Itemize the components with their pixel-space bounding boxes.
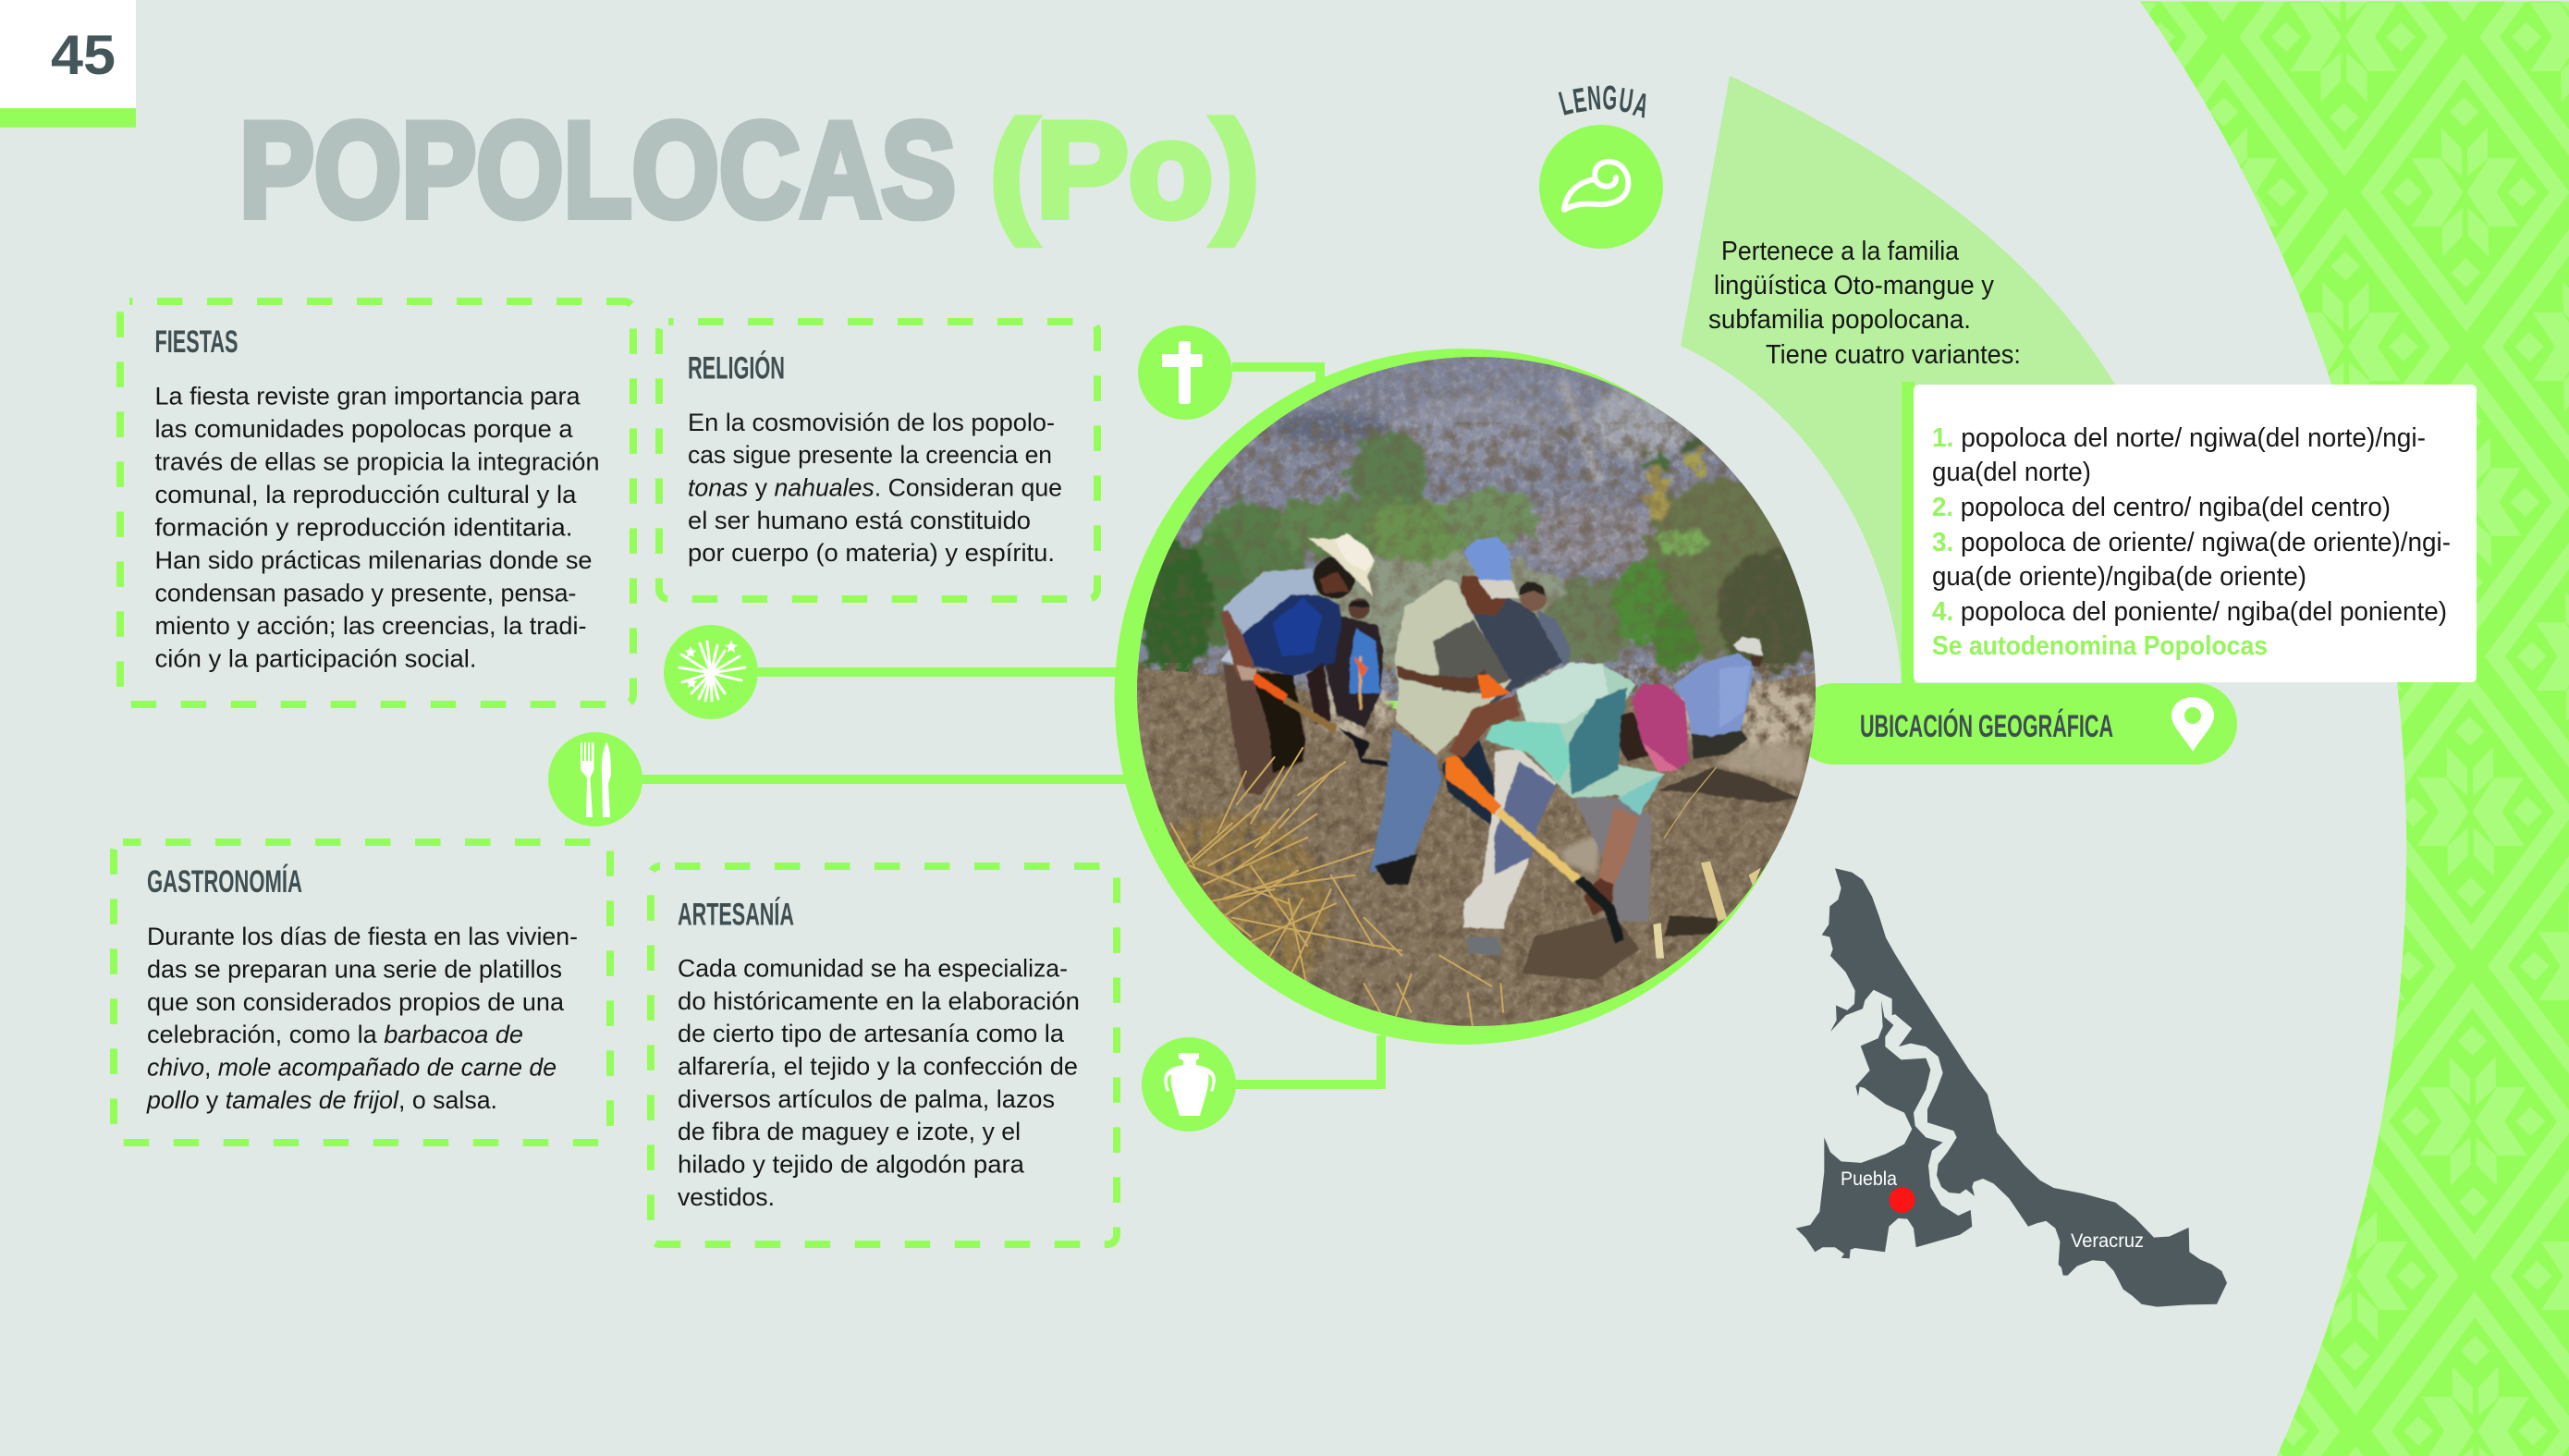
soil — [1137, 663, 1816, 1026]
patterned textile band on the right — [2140, 2, 2569, 1456]
body: gastronomía: chivo, mole acompañado de carne de — [147, 1054, 557, 1082]
body: gastronomía: que son considerados propios de una — [147, 988, 565, 1016]
heading: gastronomía: GASTRONOMÍA — [147, 864, 302, 899]
worker 1 arms — [1220, 610, 1255, 681]
worker 3 head and cap — [1620, 712, 1652, 761]
worker 3 trousers — [1572, 792, 1652, 922]
body: religión: cas sigue presente la creencia en — [688, 441, 1052, 469]
worker 2 jeans — [1442, 740, 1495, 826]
worker 2 head and cap — [1461, 576, 1507, 617]
worker 3 arms — [1449, 695, 1519, 758]
heading: lengua (curved): G — [1602, 80, 1618, 117]
body: fiestas: las comunidades popolocas porque a — [155, 415, 573, 443]
body: artesanía: Cada comunidad se ha especializa- — [678, 954, 1068, 982]
red location dot — [1890, 1187, 1915, 1213]
heading: lengua (curved): E — [1571, 81, 1589, 121]
panel: variantes list: 4. popoloca del poniente/ ngiba(del poniente) — [1932, 597, 2447, 627]
body: fiestas: Han sido prácticas milenarias donde se — [155, 546, 592, 574]
heading: fiestas: FIESTAS — [155, 324, 239, 360]
label: Veracruz: Veracruz — [2071, 1230, 2144, 1252]
worker 2 arm and grip — [1396, 666, 1486, 693]
map: Puebla and Veracruz — [1796, 868, 2227, 1307]
heading: artesanía: ARTESANÍA — [678, 897, 794, 932]
heading: lengua (curved): N — [1586, 80, 1602, 118]
panel: lengua fan — [1681, 76, 2115, 682]
body: artesanía — [678, 954, 1080, 1211]
lengua description text: subfamilia popolocana. — [1708, 305, 1971, 335]
body: artesanía: de cierto tipo de artesanía como la — [678, 1020, 1065, 1047]
corn stalks — [1701, 862, 1727, 922]
body: gastronomía: das se preparan una serie de platillos — [147, 956, 562, 984]
page number tab — [0, 0, 136, 128]
worker 1 trousers — [1223, 664, 1305, 795]
body: fiestas: ción y la participación social. — [155, 645, 477, 673]
body: religión: el ser humano está constituido — [688, 507, 1031, 534]
panel: artesanía — [651, 866, 1117, 1244]
panel: variantes list: 1. popoloca del norte/ ngiwa(del norte)/ngi- — [1932, 423, 2426, 453]
body: artesanía: de fibra de maguey e izote, y el — [678, 1118, 1021, 1145]
panel: religión — [659, 322, 1097, 599]
body: artesanía: alfarería, el tejido y la confección de — [678, 1052, 1078, 1080]
panel: variantes list: 2. popoloca del centro/ ngiba(del centro) — [1932, 493, 2391, 522]
workers 3 and 4 — [1445, 636, 1805, 980]
photo: farmers working the soil — [1137, 357, 1816, 1026]
lengua description text: Tiene cuatro variantes: — [1766, 340, 2021, 370]
panel: variantes list: 3. popoloca de oriente/ ngiwa(de oriente)/ngi- — [1932, 528, 2451, 557]
body: religión: En la cosmovisión de los popolo- — [688, 409, 1055, 436]
heading: lengua (curved): A — [1630, 86, 1653, 126]
body: fiestas: miento y acción; las creencias, la tradi- — [155, 612, 586, 640]
panel: variantes list — [1902, 382, 2477, 683]
worker 3 shirt — [1518, 664, 1666, 799]
Puebla area shape — [1796, 1000, 1972, 1258]
icon: clay jar (artesanía) — [1142, 1037, 1236, 1132]
body: religión — [688, 409, 1062, 567]
panel: variantes list: gua(del norte) — [1932, 458, 2091, 487]
dry grass — [1170, 748, 1503, 1026]
body: artesanía: hilado y tejido de algodón para — [678, 1150, 1025, 1178]
body: gastronomía — [146, 923, 578, 1114]
lengua description text — [1708, 237, 2021, 370]
heading: lengua (curved): U — [1617, 81, 1635, 121]
worker 3 shovel — [1445, 755, 1500, 815]
panel: gastronomía — [114, 842, 610, 1143]
page number tab: 45 — [51, 24, 116, 86]
worker 2 shirt — [1466, 597, 1560, 704]
body: fiestas: condensan pasado y presente, pensa- — [155, 579, 577, 606]
body: fiestas: La fiesta reviste gran importancia para — [155, 383, 581, 410]
background boy — [1325, 598, 1384, 728]
panel: variantes list: Se autodenomina Popolocas — [1932, 631, 2268, 661]
workers 1 and 2 with background figures — [1220, 533, 1570, 885]
body: gastronomía: celebración, como la barbacoa de — [147, 1021, 523, 1048]
photo ring — [1115, 349, 1810, 1045]
body: gastronomía: pollo y tamales de frijol, o salsa. — [146, 1086, 497, 1114]
panel: ubicación geográfica bar — [1793, 683, 2237, 765]
title: (Po) — [990, 94, 1259, 245]
lengua description text: Pertenece a la familia — [1721, 237, 1960, 266]
label: Puebla: Puebla — [1841, 1168, 1897, 1190]
icon: location pin — [2171, 697, 2214, 752]
connector lines — [642, 367, 1381, 1084]
icon: lengua speech scroll — [1539, 125, 1663, 249]
body: religión: por cuerpo (o materia) y espíritu. — [688, 539, 1055, 567]
worker 1 head and hat — [1314, 557, 1355, 599]
icon: cross (religión) — [1138, 325, 1232, 420]
panel: ubicación geográfica bar: UBICACIÓN GEOGRÁFICA — [1860, 709, 2113, 744]
background man — [1519, 582, 1570, 666]
heading: lengua (curved) — [1556, 80, 1653, 126]
mountain — [1137, 357, 1816, 701]
body: artesanía: do históricamente en la elaboración — [678, 987, 1080, 1015]
worker 1 hoe — [1253, 673, 1288, 701]
body: artesanía: vestidos. — [678, 1183, 775, 1211]
Veracruz area shape — [1822, 868, 2227, 1307]
body: fiestas: comunal, la reproducción cultural y la — [155, 481, 577, 508]
worker 1 shirt — [1223, 569, 1319, 633]
lengua description text: lingüística Oto-mangue y — [1714, 271, 1994, 300]
heading: religión: RELIGIÓN — [688, 351, 785, 386]
panel: fiestas — [120, 301, 633, 704]
icon: fireworks (fiestas) — [664, 625, 758, 719]
soil mound and dust — [1658, 767, 1800, 802]
body: fiestas — [155, 383, 599, 673]
body: artesanía: diversos artículos de palma, lazos — [678, 1085, 1055, 1113]
panel: variantes list: gua(de oriente)/ngiba(de oriente) — [1932, 562, 2306, 592]
worker 4 — [1692, 730, 1747, 758]
trees — [1138, 432, 1821, 679]
body: fiestas: través de ellas se propicia la integración — [155, 447, 599, 475]
title: POPOLOCAS — [239, 94, 956, 245]
heading: lengua (curved): L — [1556, 84, 1576, 123]
icon: fork and knife (gastronomía) — [548, 732, 642, 826]
body: religión: tonas y nahuales. Consideran que — [688, 473, 1062, 501]
body: fiestas: formación y reproducción identitaria. — [155, 514, 573, 542]
body: gastronomía: Durante los días de fiesta en las vivien- — [147, 923, 578, 950]
